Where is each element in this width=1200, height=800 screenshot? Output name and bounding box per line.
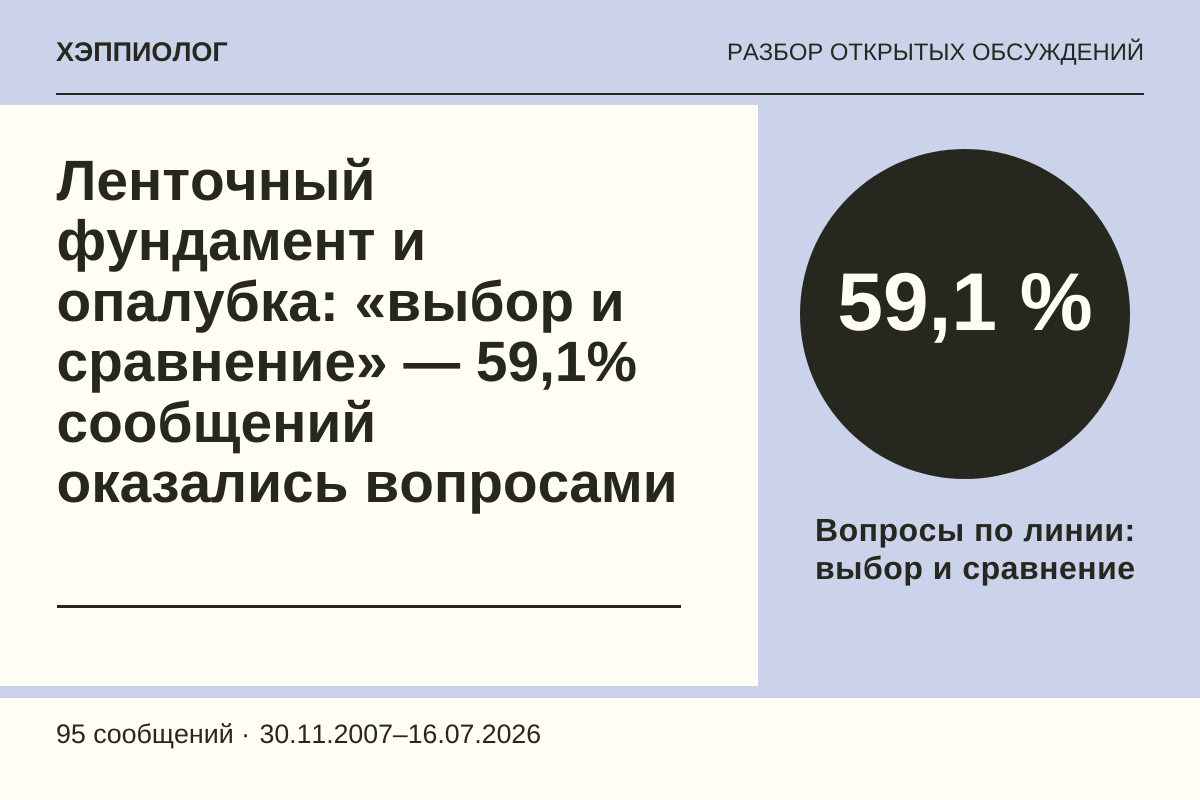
footer band [0,698,1200,800]
panel: headline card [0,105,758,686]
stat caption: Вопросы по линии: [815,512,1136,548]
brand name: ХЭППИОЛОГ [56,37,228,67]
header caption: РАЗБОР ОТКРЫТЫХ ОБСУЖДЕНИЙ [727,39,1144,66]
stat caption: выбор и сравнение [815,550,1136,586]
title: сообщений [56,392,376,455]
title underline [57,605,681,608]
title [56,150,678,515]
footer text: 95 сообщений · 30.11.2007–16.07.2026 [56,719,541,749]
stat value: 59,1 % [837,257,1093,348]
title: фундамент и [56,210,426,273]
stat caption [815,512,1136,586]
title: сравнение» — 59,1% [56,331,637,394]
header rule [56,93,1144,95]
title: опалубка: «выбор и [56,271,625,334]
title: Ленточный [56,150,375,213]
title: оказались вопросами [56,452,678,515]
stat circle [800,149,1130,479]
